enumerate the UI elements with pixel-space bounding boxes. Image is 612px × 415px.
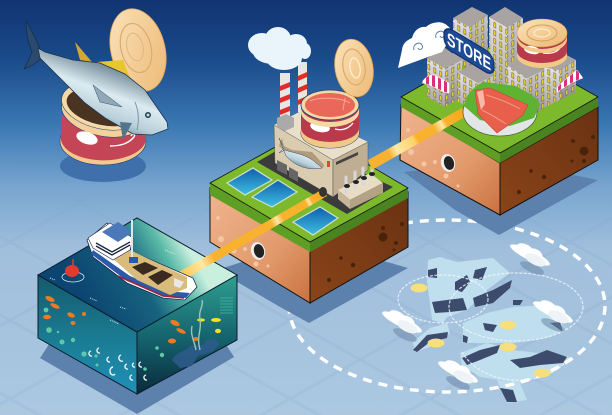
conveyor beam boat to factory (179, 189, 327, 280)
panel: opened tuna can with fish (24, 3, 174, 182)
world map with shipping routes (289, 220, 605, 403)
back left tower (453, 7, 488, 70)
pipe opening in soil (439, 152, 457, 174)
panel: factory block (87, 27, 408, 303)
fishing boat (87, 220, 197, 300)
red buoy (62, 259, 84, 282)
ocean block (38, 218, 237, 394)
right building (507, 55, 544, 118)
smoke cloud (248, 27, 311, 70)
panel: fishing boat in ocean (38, 218, 237, 394)
back right tower (489, 7, 523, 100)
map: cloud shadows (391, 258, 567, 393)
map: outer dashed route (289, 220, 605, 392)
smokestacks (280, 62, 307, 123)
coral reef (172, 300, 220, 368)
soil bubbles (216, 216, 270, 268)
map: inner thin dashed routes (398, 273, 583, 380)
can with tuna meat on factory (301, 90, 359, 148)
clownfish and bubbles (43, 295, 221, 380)
factory building (274, 110, 368, 197)
left building (427, 48, 462, 107)
conveyor beam factory to store (368, 108, 465, 170)
map: dark land detail (413, 267, 567, 402)
plate with tuna steak (463, 82, 540, 136)
can body (57, 75, 149, 165)
store sign: STORE (447, 29, 491, 75)
map: yellow port markers (410, 284, 550, 378)
map: clouds (379, 238, 576, 388)
asphalt yard (257, 140, 393, 214)
tuna fish (24, 21, 168, 140)
left awning (422, 75, 449, 93)
right awning (557, 70, 583, 92)
grass top (210, 129, 408, 252)
soil faces (210, 188, 408, 303)
panel: store block (368, 7, 598, 215)
soil faces (400, 105, 598, 215)
soil bubbles (406, 128, 460, 188)
soil stones (517, 135, 595, 194)
far right building (543, 50, 576, 108)
small tuna on wall (279, 138, 324, 169)
water ripples (50, 250, 175, 324)
block shadows (40, 160, 598, 414)
city buildings (422, 7, 583, 118)
swirl cloud (398, 22, 452, 68)
can lid (102, 3, 174, 97)
ruler tick marks (220, 298, 233, 313)
grass top (401, 41, 598, 163)
pipe opening in soil (249, 240, 267, 262)
map: continents (413, 257, 570, 403)
pools (227, 168, 338, 235)
store sign (444, 25, 494, 77)
open can lid (330, 36, 378, 100)
middle building (458, 63, 495, 112)
machine block with valves (338, 161, 383, 209)
can shadow (60, 150, 146, 182)
soil stones (327, 222, 404, 282)
closed can on store (517, 19, 567, 68)
